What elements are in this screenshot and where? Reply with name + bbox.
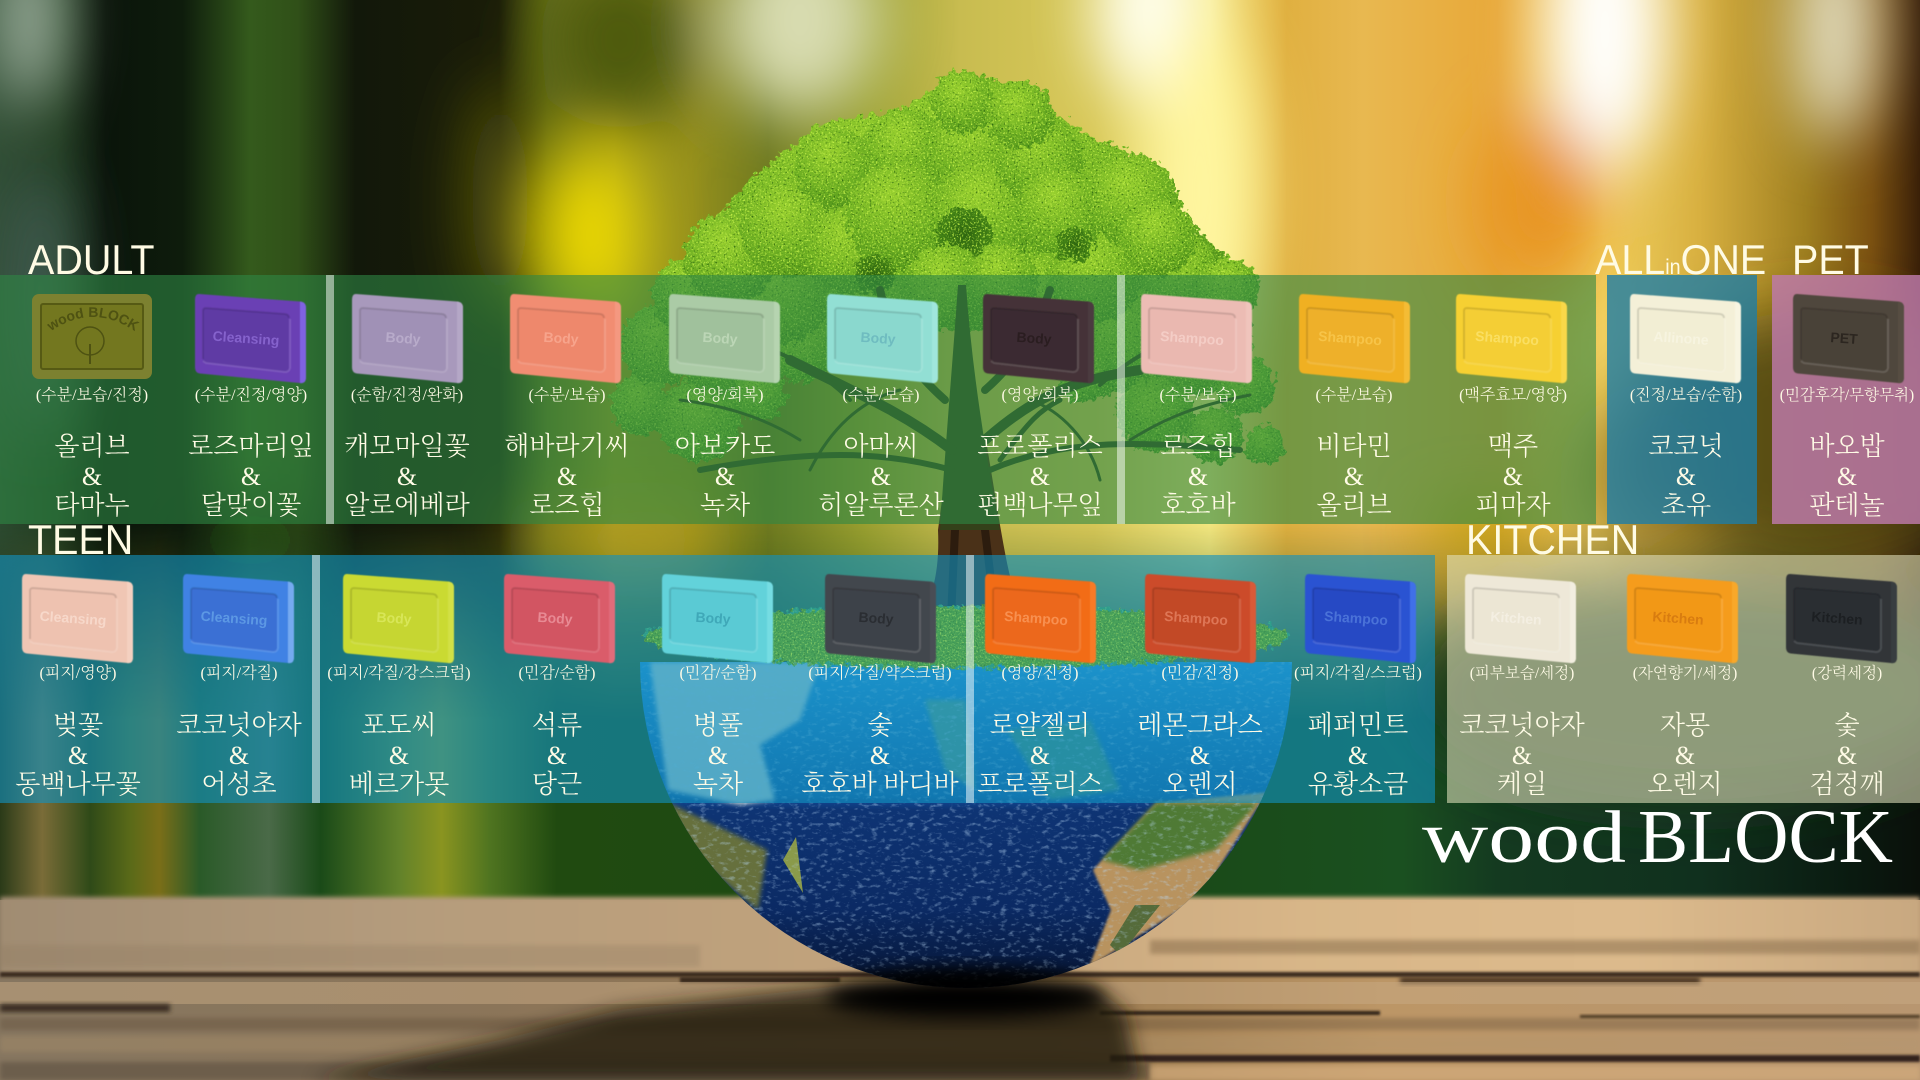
heading: ALLinONE: ALLinONE [1595, 236, 1766, 283]
benefits: (피지/각질/약스크럽) [808, 665, 952, 682]
soap: Body coral: Body [543, 329, 579, 347]
soap: Body lavender: Body [385, 329, 421, 347]
heading: PET: PET [1792, 236, 1869, 283]
ingredients: 자몽 [1660, 711, 1710, 740]
soap: Kitchen orange [1626, 573, 1740, 665]
ingredients: 초유 [1661, 491, 1711, 520]
ingredients: & [1188, 462, 1208, 490]
product: vitamin and olive [1298, 293, 1411, 520]
ingredients: & [1837, 740, 1857, 770]
panel: ADULT products [0, 275, 1596, 524]
benefits: (순함/진정/완화) [351, 387, 463, 404]
ingredients [1422, 711, 1622, 800]
ingredients [1585, 711, 1785, 800]
ingredients: 비타민 [1316, 432, 1392, 461]
soap: cream: Allinone [1653, 328, 1709, 348]
benefits: (수분/보습) [1316, 387, 1392, 404]
ingredients: 오렌지 [1647, 770, 1723, 799]
product: rosehip and jojoba [1140, 293, 1253, 520]
ingredients: 캐모마일꽃 [344, 432, 470, 461]
heading: KITCHEN: KITCHEN [1466, 516, 1639, 563]
ingredients [1475, 432, 1551, 520]
product: sunflower seed and rosehip [504, 293, 630, 520]
soap: Body sage: Body [702, 329, 738, 347]
soap: Kitchen black [1785, 573, 1899, 665]
ingredients [818, 432, 944, 520]
ingredients: 검정깨 [1809, 770, 1885, 799]
ingredients: & [82, 462, 102, 490]
ingredients: 포도씨 [361, 711, 437, 740]
ingredients: & [1348, 740, 1368, 770]
ingredients: & [68, 740, 88, 770]
ingredients: & [241, 462, 261, 490]
soap: Shampoo amber: Shampoo [1318, 328, 1382, 348]
soap: Body coral [509, 293, 622, 384]
benefits: (수분/보습) [529, 387, 605, 404]
benefits: (수분/보습/진정) [36, 387, 148, 404]
soap: Kitchen orange: Kitchen [1652, 608, 1704, 628]
ingredients [504, 432, 630, 520]
ingredients: 올리브 [54, 432, 130, 461]
soap: Body dark brown [982, 293, 1095, 384]
product: avocado and green tea [668, 294, 781, 520]
panel: PET product [1772, 275, 1920, 524]
product: olive and tamanu [32, 294, 152, 520]
benefits: (자연향기/세정) [1633, 665, 1737, 682]
product: propolis and cypress leaf [977, 293, 1103, 520]
soap: Cleansing blue: Cleansing [200, 608, 268, 628]
ingredients: & [229, 740, 249, 770]
soap: Kitchen black: Kitchen [1811, 608, 1863, 628]
soap: off-white: Kitchen [1490, 608, 1542, 628]
ingredients [977, 432, 1103, 520]
soap: Body cyan: Body [695, 609, 731, 627]
benefits: (수분/보습) [1160, 387, 1236, 404]
ingredients [1160, 432, 1236, 520]
panel: KITCHEN products [1447, 555, 1920, 803]
product: beer and castor [1455, 293, 1568, 520]
ingredients: & [715, 462, 735, 490]
ingredients: 벚꽃 [53, 711, 103, 740]
ingredients: & [1344, 462, 1364, 490]
benefits: (영양/진정) [1002, 665, 1078, 682]
product: charcoal and black sesame [1767, 555, 1920, 803]
heading: ADULT: ADULT [28, 236, 155, 283]
ingredients: 어성초 [201, 770, 277, 799]
ingredients: & [547, 740, 567, 770]
ingredients: 숯 [1834, 711, 1860, 740]
product: coconut palm and houttuynia [159, 555, 319, 803]
product: baobab and panthenol [1767, 275, 1920, 524]
product: grapefruit and orange [1605, 555, 1765, 803]
ingredients: 유황소금 [1308, 770, 1408, 799]
soap: Body aqua [826, 293, 939, 384]
ingredients: 히알루론산 [818, 491, 944, 520]
ingredients: 타마누 [54, 491, 130, 520]
ingredients: & [1676, 462, 1696, 490]
product: royal jelly and propolis [960, 555, 1120, 803]
ingredients [299, 711, 499, 800]
ingredients: 오렌지 [1162, 770, 1238, 799]
ingredients: & [871, 462, 891, 490]
ingredients [1316, 432, 1392, 520]
ingredients: 로즈힙 [529, 491, 605, 520]
soap: off-white [1464, 573, 1578, 665]
benefits: (맥주효모/영양) [1459, 387, 1567, 404]
ingredients: & [1503, 462, 1523, 490]
benefits: (피부보습/세정) [1470, 665, 1574, 682]
soap: Body rose [503, 573, 617, 665]
benefits: (피지/각질) [201, 665, 277, 682]
benefits: (피지/영양) [40, 665, 116, 682]
ingredients [344, 432, 470, 520]
ingredients: 프로폴리스 [977, 432, 1103, 461]
benefits: (수분/보습) [843, 387, 919, 404]
soap: Body cyan [661, 573, 775, 665]
ingredients: 녹차 [693, 770, 743, 799]
soap: Shampoo pink [1140, 293, 1253, 384]
heading: TEEN: TEEN [28, 516, 133, 563]
ingredients [1586, 432, 1786, 520]
product: centella and green tea [638, 555, 798, 803]
benefits: (영양/회복) [687, 387, 763, 404]
soap: woodBLOCK olive: wood BLOCK [47, 307, 140, 331]
half globe [640, 660, 1292, 1003]
benefits: (진정/보습/순함) [1630, 387, 1742, 404]
soap: woodBLOCK olive [32, 294, 152, 379]
soap: Body charcoal [824, 573, 938, 665]
ingredients [1747, 711, 1920, 800]
soap: PET dark [1792, 293, 1906, 385]
benefits: (민감/순함) [680, 665, 756, 682]
product: peppermint and sulfur salt [1278, 555, 1438, 803]
soap: Cleansing peach [21, 573, 135, 665]
ingredients: 로즈마리잎 [188, 432, 314, 461]
ingredients: 로얄젤리 [990, 711, 1090, 740]
ingredients: 동백나무꽃 [15, 770, 141, 799]
ingredients [0, 711, 178, 800]
product: rosemary leaf and evening primrose [188, 293, 314, 520]
ingredients: 녹차 [700, 491, 750, 520]
ingredients [1258, 711, 1458, 800]
benefits: (민감/진정) [1162, 665, 1238, 682]
ingredients: 맥주 [1488, 432, 1538, 461]
benefits: (피지/각질/강스크럽) [327, 665, 471, 682]
ingredients: & [389, 740, 409, 770]
product: flaxseed and hyaluronic acid [818, 293, 944, 520]
soap: cream [1629, 293, 1742, 384]
ingredients: 코코넛야자 [176, 711, 302, 740]
soap: Shampoo yellow: Shampoo [1475, 328, 1539, 348]
ingredients: 병풀 [693, 711, 743, 740]
ingredients [780, 711, 980, 800]
ingredients: 올리브 [1316, 491, 1392, 520]
soap: Shampoo brick: Shampoo [1164, 608, 1228, 628]
panel: TEEN products [0, 555, 1435, 803]
ingredients: 케일 [1497, 770, 1547, 799]
ingredients [940, 711, 1140, 800]
ingredients: 편백나무잎 [977, 491, 1103, 520]
soap: Cleansing purple [194, 293, 307, 384]
grass on globe [644, 606, 1288, 668]
soap: Shampoo orange: Shampoo [1004, 608, 1068, 628]
benefits: (민감/순함) [519, 665, 595, 682]
ingredients [188, 432, 314, 520]
ingredients: 판테놀 [1809, 491, 1885, 520]
ingredients: 아마씨 [843, 432, 919, 461]
soap: Body aqua: Body [860, 329, 896, 347]
ingredients: & [708, 740, 728, 770]
logo: woodBLOCK [1415, 800, 1905, 875]
ingredients: 호호바 [1160, 491, 1236, 520]
ingredients: & [1512, 740, 1532, 770]
ingredients: 알로에베라 [344, 491, 470, 520]
product: coconut palm and kale [1442, 555, 1602, 803]
ingredients [618, 711, 818, 800]
product: charcoal and jojoba body bar [800, 555, 960, 803]
ingredients: 로즈힙 [1160, 432, 1236, 461]
ingredients: 해바라기씨 [504, 432, 630, 461]
product: cherry blossom and camellia [0, 555, 158, 803]
ingredients: 코코넛야자 [1459, 711, 1585, 740]
ingredients: & [1190, 740, 1210, 770]
soap: Cleansing blue [182, 573, 296, 665]
ingredients: 숯 [867, 711, 893, 740]
ingredients: & [397, 462, 417, 490]
soap: Body lavender [351, 293, 464, 384]
soap: Body charcoal: Body [858, 609, 894, 627]
ingredients: 피마자 [1475, 491, 1551, 520]
soap: Body lime [342, 573, 456, 665]
ingredients: 달맞이꽃 [201, 491, 301, 520]
benefits: (수분/진정/영양) [195, 387, 307, 404]
ingredients: & [557, 462, 577, 490]
soap: Cleansing purple: Cleansing [212, 328, 280, 348]
soap: Body lime: Body [376, 609, 412, 627]
ingredients: 프로폴리스 [977, 770, 1103, 799]
ingredients: & [1030, 462, 1050, 490]
ingredients: 바오밥 [1809, 432, 1885, 461]
ingredients [1747, 432, 1920, 520]
ingredients: 호호바 바디바 [801, 770, 959, 799]
product: pomegranate and carrot [477, 555, 637, 803]
ingredients: 코코넛 [1648, 432, 1724, 461]
soap: Body dark brown: Body [1016, 329, 1052, 347]
ingredients: 당근 [532, 770, 582, 799]
ingredients [139, 711, 339, 800]
ingredients: & [870, 740, 890, 770]
ingredients: & [1675, 740, 1695, 770]
soap: Body sage [668, 294, 781, 384]
ingredients [675, 432, 775, 520]
benefits: (피지/각질/스크럽) [1294, 665, 1422, 682]
soap: Shampoo brick [1144, 573, 1258, 665]
product: grape seed and bergamot [319, 555, 479, 803]
soap: Shampoo yellow [1455, 293, 1568, 384]
product: coconut and colostrum [1629, 293, 1742, 520]
benefits: (강력세정) [1812, 665, 1882, 682]
tree trunk and branches [680, 285, 1250, 650]
soap: Body rose: Body [537, 609, 573, 627]
wooden table [0, 897, 1920, 1080]
ingredients: & [1030, 740, 1050, 770]
ingredients [457, 711, 657, 800]
ingredients: 페퍼민트 [1308, 711, 1408, 740]
ingredients [1100, 711, 1300, 800]
benefits: (영양/회복) [1002, 387, 1078, 404]
ingredients: 베르가못 [349, 770, 449, 799]
ingredients: 레몬그라스 [1137, 711, 1263, 740]
soap: PET dark: PET [1830, 329, 1859, 347]
product: chamomile and aloe vera [344, 293, 470, 520]
soap: Shampoo pink: Shampoo [1160, 328, 1224, 348]
soap: Shampoo orange [984, 573, 1098, 665]
ingredients: 아보카도 [675, 432, 775, 461]
ingredients [54, 432, 130, 520]
soap: Shampoo cobalt: Shampoo [1324, 608, 1388, 628]
panel: ALLinONE product [1607, 275, 1757, 524]
soap: Cleansing peach: Cleansing [39, 608, 107, 628]
tree canopy [610, 70, 1285, 465]
product: lemongrass and orange [1120, 555, 1280, 803]
ingredients: & [1837, 462, 1857, 490]
soap: Shampoo cobalt [1304, 573, 1418, 665]
ingredients: 석류 [532, 711, 582, 740]
soap: Shampoo amber [1298, 293, 1411, 384]
benefits: (민감후각/무향무취) [1780, 387, 1914, 404]
